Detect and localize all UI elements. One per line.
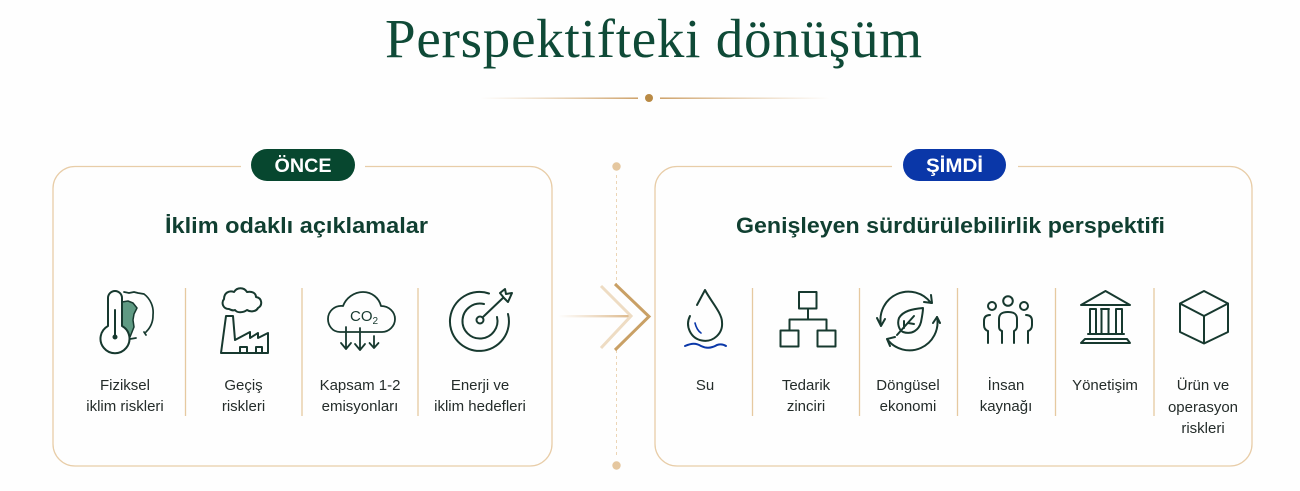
item: scope 1-2 emissions [320, 292, 400, 415]
item: energy and climate targets [434, 289, 526, 415]
label: Tedarik [782, 377, 831, 394]
item: transition risks [221, 288, 268, 415]
badge: ŞİMDİ: ŞİMDİ [926, 156, 983, 177]
icon: water drop [685, 290, 726, 348]
label: kaynağı [980, 398, 1032, 415]
item: governance [1072, 291, 1138, 394]
badge: ŞİMDİ [903, 149, 1006, 181]
panel: now [655, 149, 1252, 466]
item: human resources [980, 296, 1032, 415]
icon: CO2 cloud: CO [350, 308, 372, 325]
item: physical climate risks [86, 291, 164, 415]
label: zinciri [787, 398, 825, 415]
label: Yönetişim [1072, 377, 1138, 394]
icon: CO2 cloud [328, 292, 395, 350]
label: ekonomi [880, 398, 936, 415]
item: product and operations risks [1168, 291, 1238, 437]
icon: people [984, 296, 1032, 343]
label: Geçiş [224, 377, 263, 394]
icon: factory with cloud [221, 288, 268, 353]
icon: hierarchy [780, 292, 836, 346]
badge: ÖNCE: ÖNCE [274, 156, 332, 177]
arrow [558, 284, 649, 350]
dividers [752, 288, 1154, 416]
title divider [480, 94, 830, 102]
icon: CO2 cloud: 2 [372, 316, 378, 327]
icon: cube [1180, 291, 1228, 344]
label: Ürün ve [1177, 376, 1229, 394]
label: iklim hedefleri [434, 398, 526, 415]
panel heading: before: İklim odaklı açıklamalar [165, 213, 428, 238]
center dashed divider [612, 162, 621, 470]
label: iklim riskleri [86, 398, 164, 415]
panel: before [53, 149, 552, 466]
icon: leaf in recycling arrows [877, 292, 940, 350]
icon: target with arrow [450, 289, 512, 351]
panel heading: now: Genişleyen sürdürülebilirlik perspektifi [736, 213, 1165, 238]
label: operasyon [1168, 399, 1238, 416]
label: İnsan [988, 376, 1024, 394]
label: riskleri [1181, 420, 1225, 437]
badge: ÖNCE [251, 149, 355, 181]
item: circular economy [876, 292, 940, 415]
icon: thermometer and globe [100, 291, 153, 353]
title: Perspektifteki dönüşüm [385, 8, 922, 69]
dividers [186, 288, 418, 416]
label: Kapsam 1-2 [320, 377, 400, 394]
item: supply chain [780, 292, 836, 415]
label: Su [696, 377, 714, 394]
label: riskleri [222, 398, 265, 415]
label: emisyonları [322, 398, 398, 415]
item: water [685, 290, 726, 394]
label: Enerji ve [451, 377, 509, 394]
icon: institution building [1081, 291, 1130, 343]
label: Fiziksel [100, 377, 150, 394]
label: Döngüsel [876, 377, 940, 394]
